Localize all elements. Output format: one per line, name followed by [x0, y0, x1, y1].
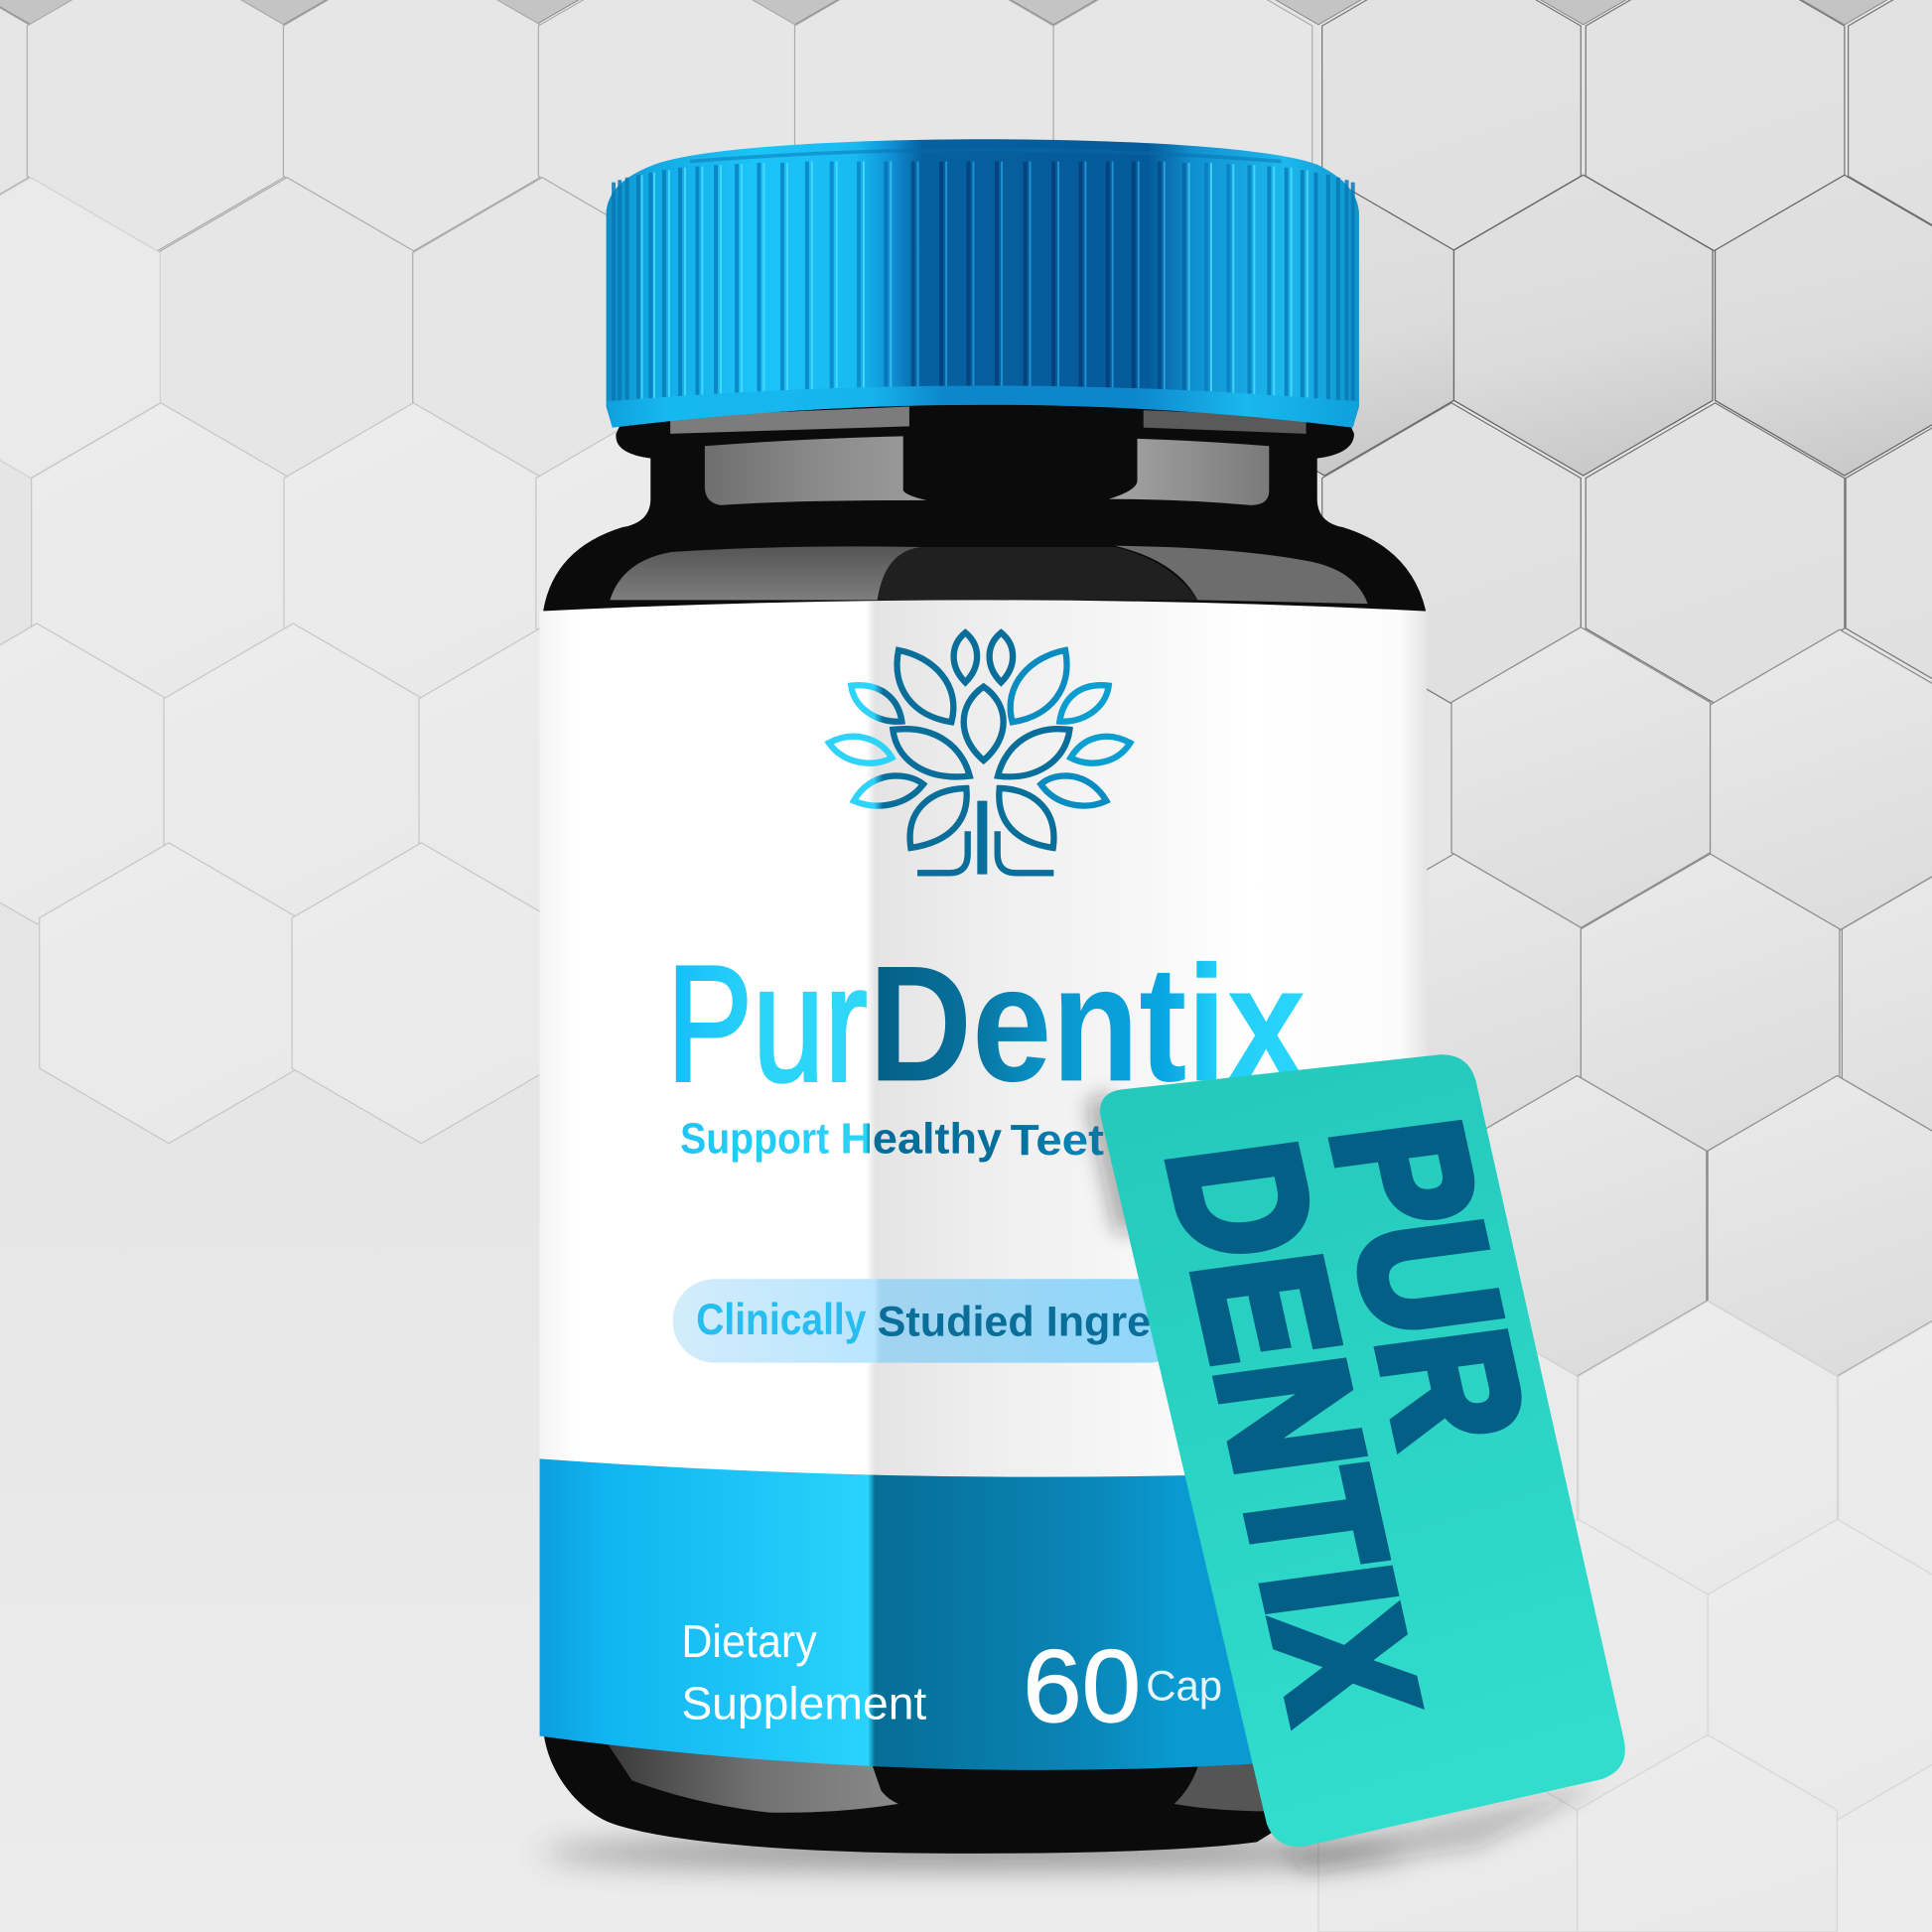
brand name: [666, 931, 1307, 1116]
60 capsules count: [1023, 1629, 1222, 1744]
card text: DENTIX: DENTIX: [1129, 1132, 1456, 1730]
bottle: [540, 139, 1427, 1854]
tagline: Support: [680, 1116, 829, 1164]
card text: PUR: PUR: [1294, 1110, 1564, 1453]
dietary supplement: [681, 1615, 927, 1728]
card shadow: [1087, 1090, 1601, 1872]
pill: clinically studied: [673, 1279, 1190, 1363]
cap: [607, 139, 1359, 428]
white label: [540, 600, 1427, 1479]
logo: tree of leaves: [829, 632, 1130, 875]
60 capsules count: Cap: [1146, 1663, 1222, 1710]
tagline: [680, 1116, 1104, 1165]
ground shadow under bottle: [542, 1840, 1405, 1866]
blue band: [540, 1458, 1427, 1770]
60 capsules count: 60: [1023, 1629, 1141, 1744]
dietary supplement: Dietary: [681, 1615, 817, 1667]
glass highlights: [608, 407, 1368, 1813]
pill: clinically studied: Clinically: [696, 1296, 867, 1344]
cap ridges: [614, 162, 1353, 400]
pill: clinically studied: Studied Ingre: [878, 1298, 1151, 1344]
tagline: Healthy: [840, 1116, 1002, 1164]
brand name: Pur: [666, 931, 868, 1116]
teal card: [1100, 1054, 1625, 1847]
brand name: Dentix: [869, 931, 1307, 1116]
tagline: Teet: [1011, 1117, 1104, 1165]
black glass body: [543, 394, 1426, 1854]
dietary supplement: Supplement: [681, 1677, 927, 1728]
